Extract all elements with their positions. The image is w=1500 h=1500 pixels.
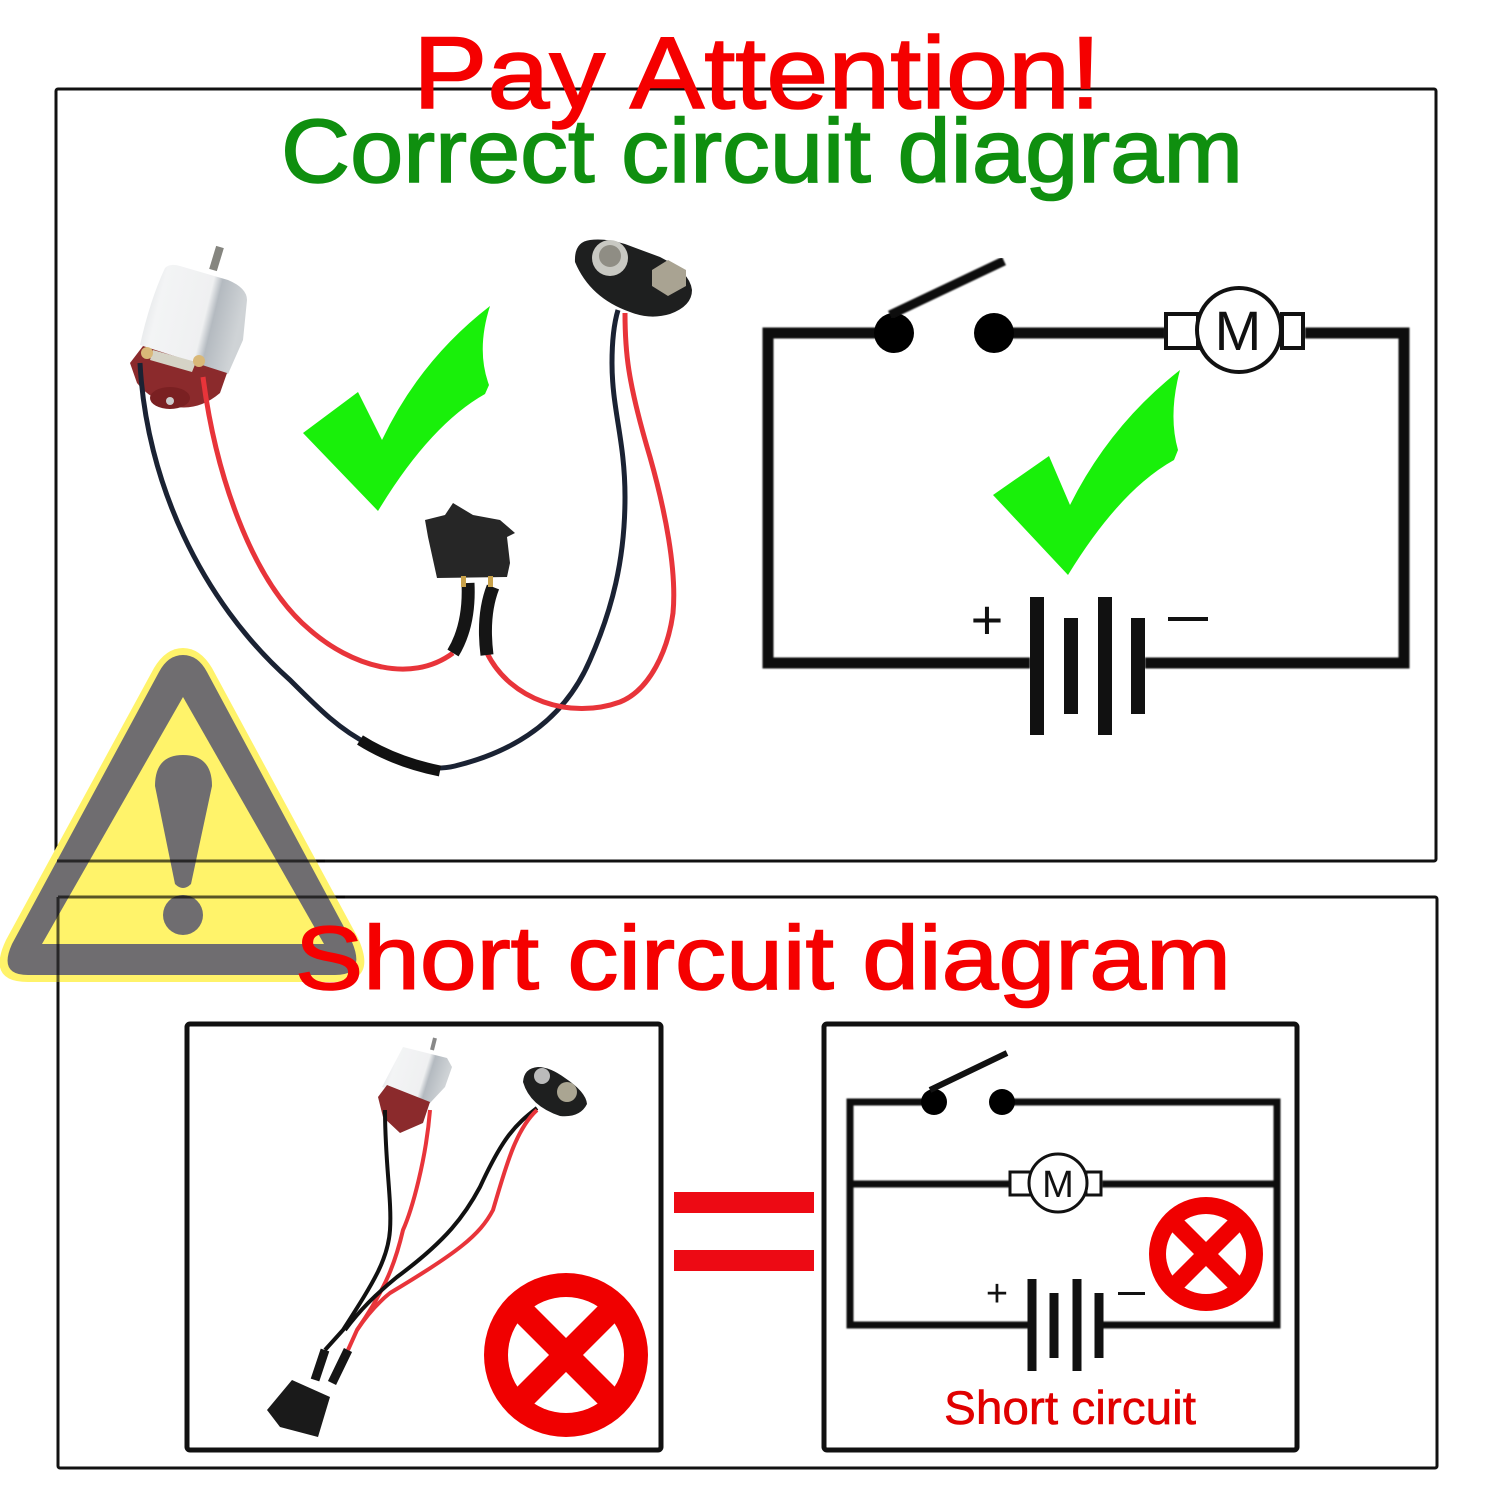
motor <box>432 1038 435 1050</box>
icon: warning triangle <box>0 648 364 982</box>
switch <box>874 313 914 353</box>
clip <box>523 1067 587 1116</box>
label: short circuit: Short circuit <box>944 1381 1196 1434</box>
motor shaft <box>213 247 220 270</box>
diagram: correct series circuit: + <box>971 588 1003 651</box>
switch <box>921 1089 947 1115</box>
red wire motor to switch <box>203 377 453 669</box>
panel: correct circuit frame <box>56 89 1436 861</box>
panel: short circuit schematic <box>824 1024 1297 1450</box>
diagram: correct series circuit: M <box>1215 299 1261 362</box>
title: Pay Attention: Pay Attention! <box>413 16 1101 130</box>
icon: equals sign <box>674 1192 814 1271</box>
panel: short circuit schematic: + <box>986 1273 1008 1315</box>
frame lines showing through the triangle <box>57 861 345 982</box>
motor end cap <box>130 346 227 407</box>
battery clip <box>575 240 692 317</box>
battery symbol <box>1032 1279 1077 1371</box>
motor symbol <box>1010 1172 1032 1195</box>
motor body <box>140 265 247 374</box>
battery symbol <box>1030 597 1044 735</box>
icon: red prohibited <box>1149 1197 1263 1311</box>
heading: correct circuit diagram: Correct circuit diagram <box>281 102 1243 202</box>
icon: red prohibited <box>484 1273 648 1437</box>
wires <box>768 333 1404 663</box>
red wire battery clip to switch <box>487 313 674 709</box>
switch <box>267 1380 330 1437</box>
rocker switch <box>425 503 515 578</box>
icon: green check mark on diagram <box>993 370 1180 575</box>
wires <box>850 1102 1277 1325</box>
motor symbol <box>1166 314 1198 348</box>
photo: correct wiring of motor, switch and battery clip <box>130 240 692 771</box>
panel: short circuit frame <box>58 897 1437 1468</box>
panel: short circuit photo <box>187 1024 661 1450</box>
diagram: correct series circuit <box>768 261 1404 735</box>
switch leads <box>453 583 493 655</box>
icon: green check mark on photo <box>303 306 490 511</box>
panel: short circuit schematic: M <box>1042 1164 1074 1206</box>
wires <box>325 1110 390 1350</box>
black wire from motor through sleeve to battery clip <box>140 310 625 768</box>
heading: short circuit diagram: Short circuit diagram <box>295 909 1231 1009</box>
